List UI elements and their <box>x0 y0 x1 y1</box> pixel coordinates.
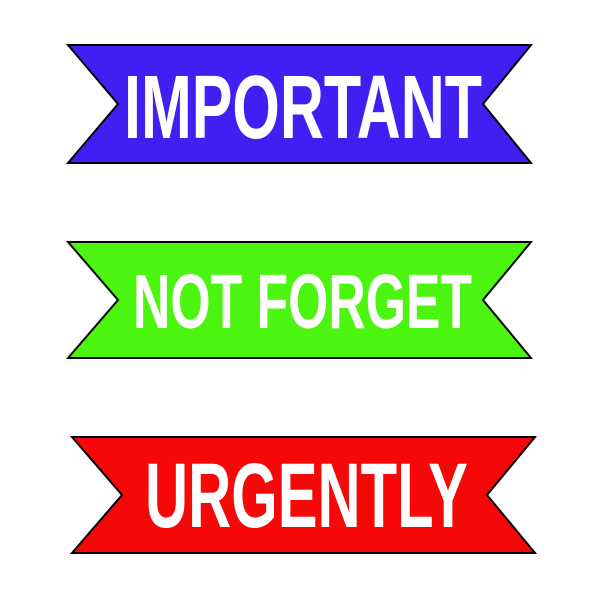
banner: not forget <box>68 242 531 358</box>
banner: important <box>68 45 531 163</box>
banner: urgently <box>72 437 535 553</box>
